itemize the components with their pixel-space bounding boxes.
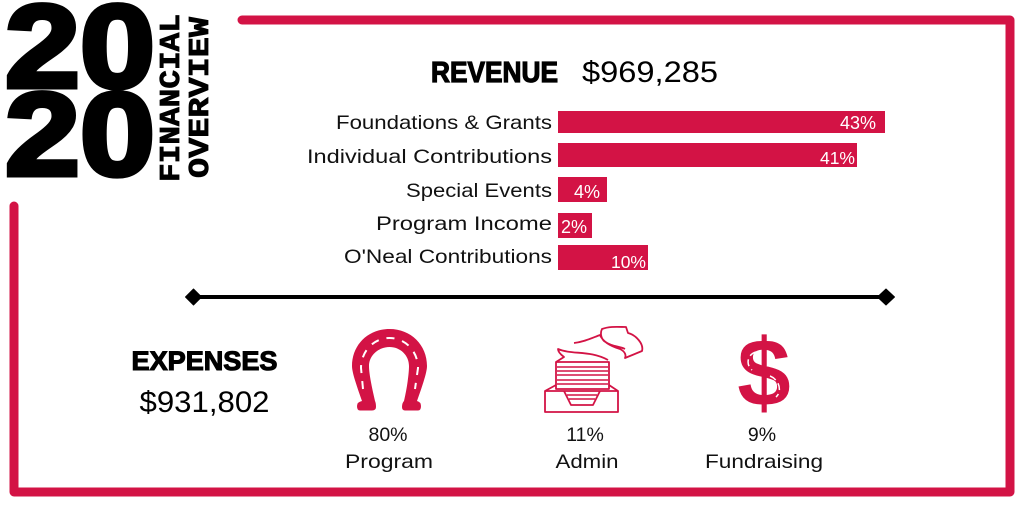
title: 2020: 20 — [5, 69, 155, 201]
divider with diamond ends — [186, 289, 894, 305]
bar: Special Events: 4% — [574, 182, 600, 202]
bar: Foundations & Grants: 43% — [840, 113, 876, 133]
icon: dollar sign: $ — [737, 320, 791, 426]
title: 2020 — [5, 0, 155, 201]
subtitle: financial overview: FINANCIAL — [155, 14, 188, 182]
icon: horseshoe — [352, 329, 427, 410]
revenue heading — [431, 56, 718, 89]
bar: O'Neal Contributions: 10% — [611, 252, 646, 272]
revenue heading: $969,285 — [582, 56, 718, 89]
expense label: admin: 11% — [566, 424, 604, 446]
bar: Foundations & Grants: Foundations & Grants — [336, 112, 552, 134]
bar: Individual Contributions — [307, 143, 857, 168]
bar: Individual Contributions: Individual Contributions — [307, 146, 552, 168]
revenue bar chart — [307, 111, 885, 272]
expense label: fundraising — [705, 424, 823, 473]
bar: Individual Contributions: 41% — [820, 148, 855, 168]
expenses heading: EXPENSES — [132, 346, 278, 376]
expense label: admin: Admin — [556, 451, 618, 473]
bar: Special Events: Special Events — [406, 180, 552, 202]
bar: Special Events — [406, 177, 607, 202]
expense label: program: 80% — [368, 424, 408, 446]
expense label: fundraising: Fundraising — [705, 451, 823, 473]
expenses heading — [132, 346, 278, 419]
icon: document tray — [545, 327, 642, 412]
expense label: program: Program — [345, 451, 433, 473]
expense label: admin — [556, 424, 618, 473]
bar: Foundations & Grants — [336, 111, 885, 134]
expense label: fundraising: 9% — [748, 424, 776, 446]
bar: Program Income — [376, 213, 592, 238]
expenses heading: $931,802 — [140, 386, 270, 419]
bar: O'Neal Contributions: O'Neal Contributions — [344, 246, 552, 268]
subtitle: financial overview: OVERVIEW — [184, 16, 217, 178]
bar: O'Neal Contributions — [344, 245, 648, 272]
subtitle: financial overview — [155, 14, 217, 182]
bar: Program Income: 2% — [561, 217, 587, 237]
expense label: program — [345, 424, 433, 473]
revenue heading: REVENUE — [431, 57, 558, 89]
bar: Program Income: Program Income — [376, 213, 552, 235]
